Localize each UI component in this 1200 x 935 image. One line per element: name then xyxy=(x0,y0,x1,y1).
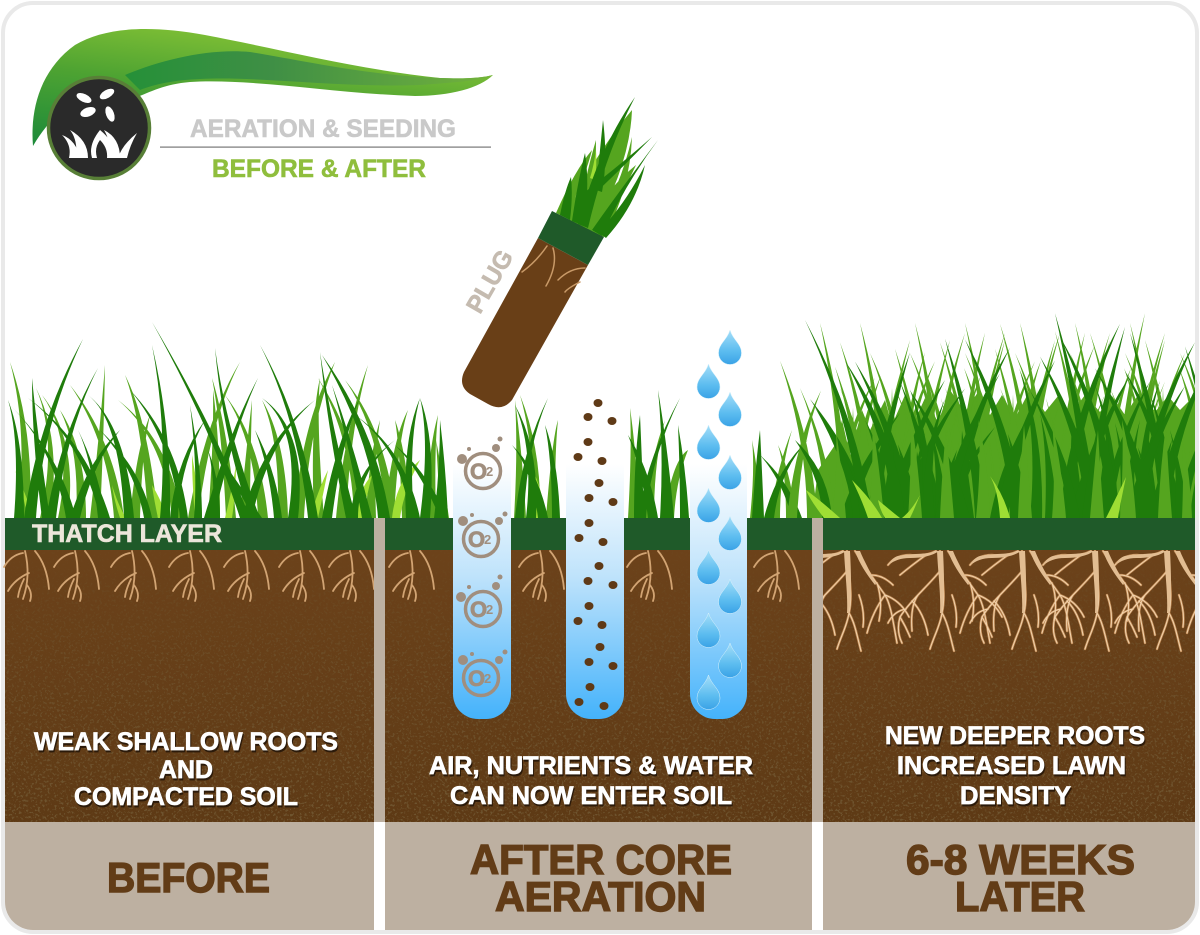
plug thatch band xyxy=(538,211,604,265)
panel: later caption: NEW DEEPER ROOTS xyxy=(885,722,1145,750)
icon: O2 bubble 2 xyxy=(458,512,508,556)
panel: before caption: COMPACTED SOIL xyxy=(74,783,298,811)
tube: water xyxy=(690,330,747,719)
heading: after core aeration xyxy=(470,836,732,920)
icon: O2 bubble 4 xyxy=(458,650,508,696)
tube: nutrients xyxy=(566,380,624,719)
dark blades xyxy=(795,313,1200,518)
panel: after core aeration caption: CAN NOW ENTER SOIL xyxy=(450,782,732,810)
plug soil xyxy=(462,238,588,407)
mid-green lower blades xyxy=(832,410,1192,518)
panel: later caption: DENSITY xyxy=(960,782,1071,810)
title: aeration and seeding: AERATION & SEEDING xyxy=(190,115,456,143)
icon: O2 bubble 4: O xyxy=(468,666,485,691)
soil panels xyxy=(5,518,1195,822)
soil plug xyxy=(461,97,658,407)
icon: O2 bubble 1: O xyxy=(470,459,487,484)
icon: O2 bubble 3: O xyxy=(470,597,487,622)
heading: six to eight weeks later: LATER xyxy=(955,873,1085,920)
icon: O2 bubble 2: 2 xyxy=(484,532,491,547)
heading: after core aeration: AFTER CORE xyxy=(470,836,732,883)
icon: O2 bubble 2: O xyxy=(468,527,485,552)
dark green blades xyxy=(8,322,808,518)
plug grass xyxy=(556,97,658,238)
panel: later caption: INCREASED LAWN xyxy=(897,752,1126,780)
light green blades xyxy=(10,362,796,518)
grass: right lawn xyxy=(780,313,1200,518)
bright accent blades xyxy=(806,476,1126,518)
thin light blades xyxy=(780,313,1200,518)
thatch layer label: THATCH LAYER xyxy=(32,520,222,548)
plug roots xyxy=(522,246,585,292)
panel: before caption: AND xyxy=(159,756,213,784)
heading: six to eight weeks later: 6-8 WEEKS xyxy=(906,836,1135,883)
bright green blades xyxy=(15,455,542,518)
plug label: PLUG xyxy=(461,245,519,318)
tube: oxygen xyxy=(453,380,511,719)
icon: O2 bubble 1 xyxy=(457,436,502,488)
icon: O2 bubble 1: 2 xyxy=(486,464,493,479)
icon: water drops xyxy=(697,330,742,710)
icon: O2 bubble 3 xyxy=(456,574,502,626)
icon: O2 bubble 4: 2 xyxy=(484,671,491,686)
heading: six to eight weeks later xyxy=(906,836,1135,920)
bottom label bands and dividers xyxy=(5,518,1195,932)
nutrient particles xyxy=(574,399,618,710)
heading: before: BEFORE xyxy=(107,854,270,901)
dense lawn base xyxy=(812,390,1195,518)
panel: later caption xyxy=(885,722,1145,810)
panel: before caption: WEAK SHALLOW ROOTS xyxy=(34,728,338,756)
panel: after core aeration caption: AIR, NUTRIENTS & WATER xyxy=(429,752,753,780)
panel: before caption xyxy=(34,728,338,811)
panel: after core aeration caption xyxy=(429,752,753,810)
icon: seed and grass badge xyxy=(48,78,150,178)
icon: O2 bubble 3: 2 xyxy=(486,602,493,617)
roots: deep after xyxy=(795,551,1200,651)
subtitle: before and after: BEFORE & AFTER xyxy=(212,155,426,183)
grass: left and middle panels xyxy=(8,322,808,518)
heading: after core aeration: AERATION xyxy=(495,873,706,920)
roots: shallow before and middle xyxy=(4,551,799,601)
icon: green leaf swoosh xyxy=(32,29,493,146)
logo header xyxy=(32,29,493,183)
